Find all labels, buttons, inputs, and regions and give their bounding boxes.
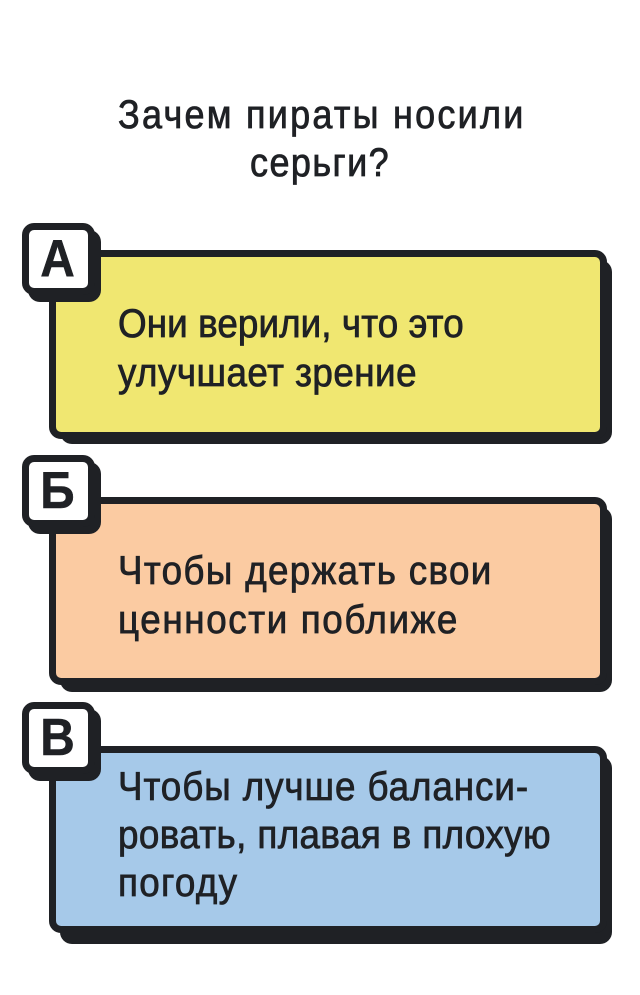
- badge V: В: [40, 709, 75, 767]
- badge B: [22, 455, 95, 527]
- answer B text: ценности поближе: [118, 598, 459, 642]
- badge V: [22, 702, 95, 774]
- panel: answer B: [22, 455, 612, 692]
- answer A text: Они верили, что это: [118, 302, 464, 346]
- title: Зачем пираты носили: [118, 93, 526, 137]
- answer V text: [118, 765, 551, 905]
- answer V text: ровать, плавая в плохую: [118, 813, 551, 857]
- answer B text: Чтобы держать свои: [118, 549, 493, 593]
- answer B text: [118, 549, 493, 642]
- badge A: А: [40, 230, 75, 288]
- answer A text: улучшает зрение: [118, 351, 417, 395]
- panel: answer A: [22, 223, 612, 444]
- badge B: Б: [40, 462, 75, 520]
- badge A: [22, 223, 95, 295]
- answer V text: Чтобы лучше баланси-: [118, 765, 529, 809]
- title: [118, 93, 526, 185]
- title: серьги?: [250, 141, 390, 185]
- answer V text: погоду: [118, 861, 238, 905]
- answer A text: [118, 302, 464, 395]
- panel: answer V: [22, 702, 612, 944]
